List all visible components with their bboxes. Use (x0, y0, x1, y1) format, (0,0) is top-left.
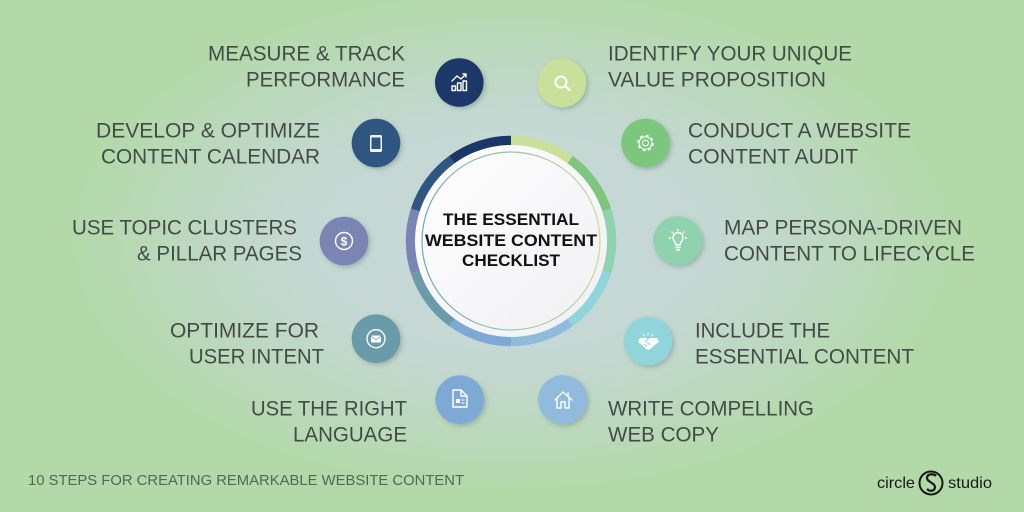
step: measure and track: PERFORMANCE (246, 68, 405, 92)
step: website content audit: CONDUCT A WEBSITE (688, 120, 911, 142)
step: topic clusters (72, 216, 368, 266)
central ring (411, 140, 611, 342)
step: compelling web copy: WRITE COMPELLING (608, 398, 814, 420)
step: topic clusters: & PILLAR PAGES (137, 242, 302, 266)
step: essential content (624, 317, 914, 368)
step: website content audit: CONTENT AUDIT (688, 146, 858, 168)
step: optimize for user intent: USER INTENT (189, 346, 324, 368)
step: develop content calendar (96, 119, 400, 168)
step: persona-driven content: CONTENT TO LIFECYCLE (724, 242, 975, 266)
central title: CHECKLIST (462, 252, 560, 270)
step: measure and track: MEASURE & TRACK (208, 42, 405, 66)
step: compelling web copy (538, 375, 814, 446)
step: value proposition: VALUE PROPOSITION (608, 68, 826, 92)
central title (425, 211, 597, 270)
step: website content audit (621, 119, 911, 168)
step: value proposition: IDENTIFY YOUR UNIQUE (608, 42, 852, 66)
step: develop content calendar: DEVELOP & OPTIMIZE (96, 120, 320, 142)
step: optimize for user intent: OPTIMIZE FOR (170, 320, 319, 342)
step: right language: LANGUAGE (293, 424, 407, 446)
step: measure and track (208, 42, 484, 107)
logo: studio (948, 475, 992, 492)
step: essential content: ESSENTIAL CONTENT (695, 346, 914, 368)
step: develop content calendar: CONTENT CALENDAR (101, 146, 320, 168)
step: persona-driven content: MAP PERSONA-DRIVEN (724, 216, 962, 240)
logo (877, 472, 992, 494)
central title: WEBSITE CONTENT (425, 232, 597, 250)
footer tagline: 10 STEPS FOR CREATING REMARKABLE WEBSITE CONTENT (28, 473, 464, 489)
central disc (415, 145, 607, 337)
step: compelling web copy: WEB COPY (608, 424, 719, 446)
step: persona-driven content (653, 216, 975, 266)
step: optimize for user intent (170, 314, 400, 368)
step: topic clusters: USE TOPIC CLUSTERS (72, 216, 297, 240)
central title: THE ESSENTIAL (443, 211, 579, 229)
step: topic clusters: $ (341, 234, 348, 248)
step: right language (251, 375, 484, 446)
step: essential content: INCLUDE THE (695, 320, 830, 342)
step: value proposition (538, 42, 852, 107)
logo: circle (877, 475, 915, 492)
step: right language: USE THE RIGHT (251, 398, 407, 420)
